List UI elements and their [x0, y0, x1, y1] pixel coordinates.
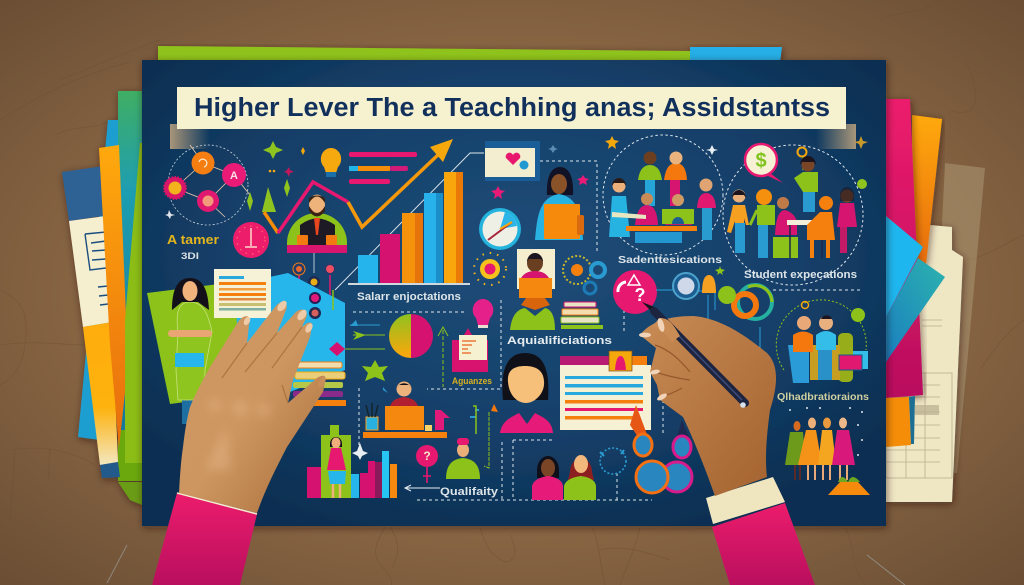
icon: person at laptop — [363, 382, 450, 438]
panel: four women — [785, 407, 870, 495]
bar chart: salary — [335, 153, 484, 290]
label: collaborations: Qlhadbratioraions — [777, 391, 869, 403]
icon: pink bulb — [473, 299, 493, 328]
side label: A tamer — [167, 233, 219, 247]
label: student expectations: Student expecations — [744, 269, 857, 281]
cream sheet with table — [886, 225, 963, 502]
left hand with pink sleeve — [152, 299, 327, 585]
icon: question pin: ? — [423, 449, 431, 463]
icon: dotted gear — [600, 448, 626, 474]
pie chart with arrows — [329, 314, 433, 358]
icon: gauge — [479, 208, 521, 250]
label: quizzes: Aguanzes — [452, 376, 492, 387]
panel: adult group — [776, 300, 868, 383]
icon: left woman on green paper — [147, 273, 345, 424]
arrow and label: quality: Qualifaity — [440, 486, 499, 498]
title banner: Higher Lever The a Teachhing anas; Assidstantss — [194, 94, 830, 122]
paper stack: left side — [62, 91, 142, 505]
label: qualifications: Aquialificiations — [507, 335, 612, 347]
icon: woman with orange folder — [535, 167, 584, 240]
panel: student group two — [723, 144, 863, 285]
dashed guides — [353, 161, 862, 500]
document card on blue sheet — [214, 269, 271, 318]
icon: pink question circle — [613, 270, 657, 314]
icon: lightbulb and text bars — [321, 148, 417, 184]
lower connector dots — [309, 290, 333, 319]
icon: pink question circle: ? — [634, 285, 646, 305]
icon: two women — [532, 455, 596, 500]
label: student group one: Sadenttesications — [618, 254, 722, 266]
icon: speaker at podium — [287, 194, 347, 253]
up arrow line — [438, 327, 448, 387]
icon: gears — [563, 256, 605, 294]
main navy poster panel — [142, 60, 886, 526]
bar chart with woman — [307, 425, 397, 498]
sparkle decorations — [165, 136, 868, 275]
title banner — [170, 87, 856, 149]
connector dots — [293, 253, 336, 305]
label: salary: Salarr enjoctations — [357, 291, 461, 303]
icon: heart screen — [485, 141, 540, 181]
icon: scissors — [630, 405, 692, 493]
icon: note card — [452, 328, 488, 372]
icon: woman portrait — [500, 353, 553, 433]
icon: lens, bell and gears — [656, 273, 772, 350]
side label — [167, 233, 219, 262]
side label: 3DI — [181, 251, 199, 262]
document card with tab — [560, 351, 651, 430]
arrow and label: quality — [405, 485, 499, 498]
icon: green star — [362, 360, 388, 381]
paper stack: top edge — [158, 46, 782, 62]
icon: question pin — [416, 445, 438, 483]
chart lines: lower middle — [470, 404, 498, 468]
icon: green shirt man — [446, 438, 480, 479]
book stack under hand — [292, 362, 346, 406]
icon: book stack — [561, 302, 603, 329]
zigzag trend arrow — [262, 139, 453, 233]
icon: sun — [474, 253, 506, 285]
panel: student group two: $ — [755, 150, 767, 172]
network diagram — [164, 145, 250, 225]
right hand holding pen — [639, 302, 815, 585]
paper stack: right side — [886, 99, 985, 502]
network diagram: A — [230, 170, 238, 182]
icon: pink clock — [233, 222, 269, 258]
icon: reader portrait with book — [510, 249, 555, 330]
panel: student group one — [603, 135, 723, 255]
